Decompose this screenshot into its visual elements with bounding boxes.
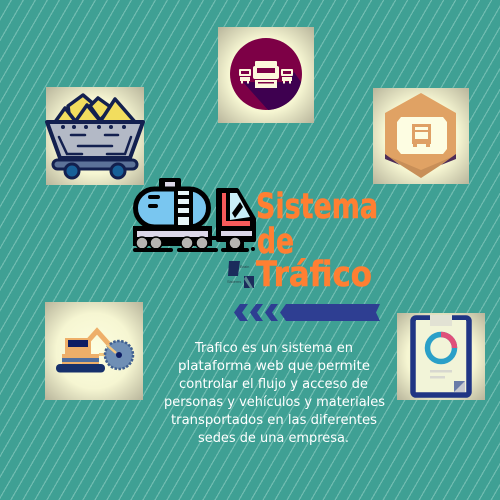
cab (218, 190, 254, 240)
text block: description: transportados en las diferentes (171, 413, 377, 428)
text block: description (164, 341, 385, 446)
trailer chassis (133, 226, 212, 246)
title: Tráfico (256, 255, 372, 295)
title: de (257, 222, 294, 262)
icon: hexagon (385, 93, 456, 178)
icon: excavator (56, 331, 133, 372)
arrow banner (234, 304, 380, 321)
panel: fleet icon (218, 27, 314, 123)
tank cap (159, 178, 181, 188)
icon: cart bucket (47, 122, 143, 178)
icon: brand logo: Brain (240, 264, 249, 269)
title: Sistema (256, 187, 378, 227)
panel: bus icon (373, 88, 469, 184)
text block: description: sedes de una empresa. (198, 431, 349, 446)
icon: clipboard (413, 315, 469, 395)
panel: mine cart icon (46, 87, 144, 185)
panel: clipboard icon (397, 313, 485, 400)
icon: bus (412, 124, 431, 147)
ground bars (135, 248, 247, 252)
text block: description: Trafico es un sistema en (194, 341, 353, 356)
title (256, 187, 378, 295)
icon: sand pile (55, 95, 135, 122)
text block: description: plataforma web que permite (178, 359, 370, 374)
text block: description: controlar el flujo y acceso de (179, 377, 368, 392)
text block: description: personas y vehículos y materiales (164, 395, 385, 410)
icon: circle with trucks (230, 38, 302, 110)
tank body (136, 189, 208, 227)
wheels (136, 237, 241, 249)
icon: tanker truck (133, 178, 255, 251)
icon: brand logo: Sistems (227, 279, 241, 284)
icon: brand logo (227, 261, 254, 288)
panel: excavator icon (45, 302, 143, 400)
